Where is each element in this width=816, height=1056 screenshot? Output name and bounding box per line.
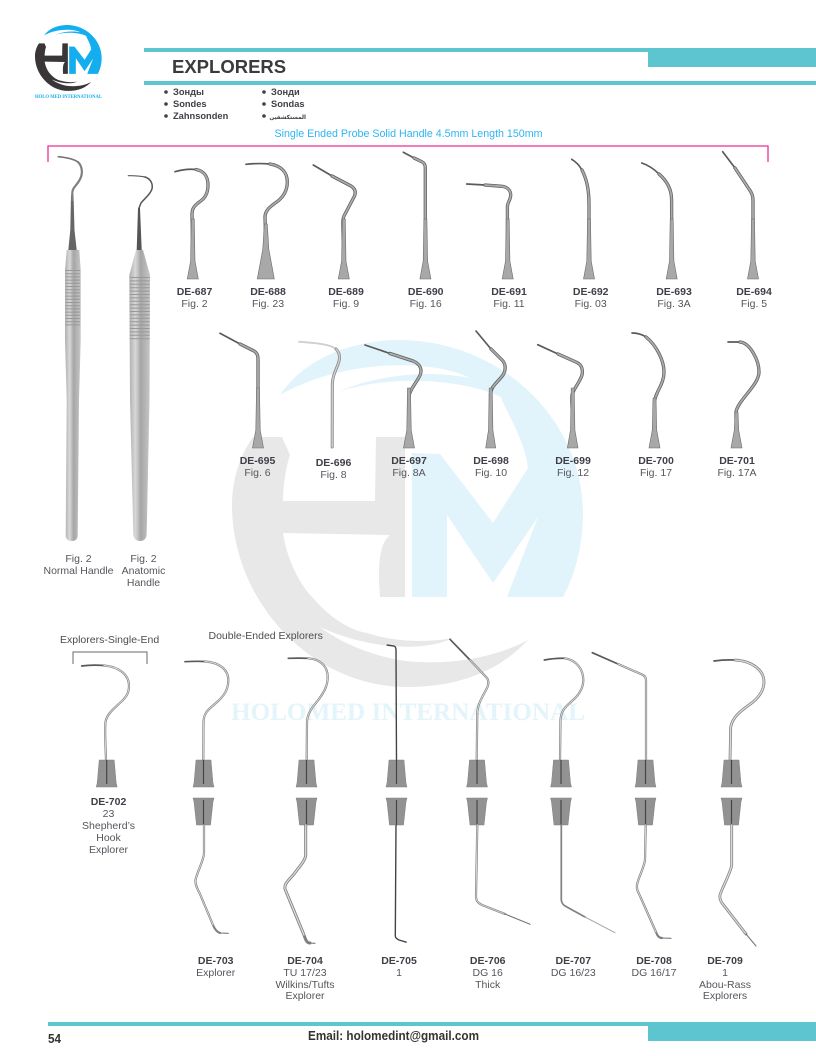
label: DE-690: DE-690 (408, 286, 444, 298)
footer email: Email: holomedint@gmail.com (308, 1029, 479, 1043)
label: DE-706: DE-706 (470, 955, 506, 967)
heading: explorers single end: Explorers-Single-End (60, 634, 159, 646)
label: DE-694: Fig. 5 (741, 298, 767, 310)
watermark logo: HOLOMED INTERNATIONAL (231, 697, 585, 726)
label: DE-709: DE-709 (707, 955, 743, 967)
label: DE-708: DG 16/17 (632, 967, 677, 979)
instrument: DE-698 (476, 331, 505, 448)
instrument: DE-690 (403, 152, 431, 279)
instrument: DE-696 (298, 342, 340, 447)
instrument: DE-705 (386, 645, 407, 942)
instrument: DE-697 (365, 345, 421, 448)
subtitle: Single Ended Probe Solid Handle 4.5mm Length 150mm (274, 128, 542, 140)
label: DE-708: DE-708 (636, 955, 672, 967)
label: DE-689: Fig. 9 (333, 298, 359, 310)
instrument: DE-699 (538, 345, 582, 448)
instrument: DE-700 (632, 333, 664, 448)
footer bars (48, 1022, 816, 1041)
label: DE-701: Fig. 17A (717, 467, 757, 479)
label: DE-698: DE-698 (473, 455, 509, 467)
label: DE-692: Fig. 03 (575, 298, 607, 310)
label: DE-706: DG 16 (473, 967, 503, 979)
label: DE-690: Fig. 16 (410, 298, 442, 310)
label: DE-687: DE-687 (177, 286, 212, 298)
instrument: DE-687 (175, 169, 208, 279)
label: DE-688: Fig. 23 (252, 298, 284, 310)
label: DE-700: Fig. 17 (640, 467, 672, 479)
label: DE-702: Explorer (89, 844, 129, 856)
label: DE-704: DE-704 (287, 955, 323, 967)
header bars (144, 48, 816, 85)
multilingual names list: Зонди (271, 87, 300, 97)
label: DE-702: Hook (96, 832, 122, 844)
label: DE-707: DE-707 (555, 955, 591, 967)
label: DE-693: Fig. 3A (657, 298, 691, 310)
label: DE-704: Wilkins/Tufts (275, 979, 335, 991)
label: DE-691: DE-691 (491, 286, 527, 298)
label: normal handle: Normal Handle (43, 565, 114, 577)
instrument: DE-695 (220, 333, 264, 448)
label: DE-702: 23 (103, 808, 114, 820)
label: DE-688: DE-688 (250, 286, 286, 298)
instrument: DE-689 (313, 165, 355, 279)
label: DE-699: DE-699 (555, 455, 591, 467)
logo (35, 25, 102, 100)
label: DE-693: DE-693 (656, 286, 692, 298)
label: DE-705: DE-705 (381, 955, 417, 967)
instrument: DE-693 (642, 163, 677, 279)
page number: 54 (48, 1032, 61, 1046)
heading: double ended explorers: Double-Ended Explorers (208, 630, 323, 642)
label: DE-702: DE-702 (91, 796, 126, 808)
label: DE-698: Fig. 10 (475, 467, 507, 479)
label: DE-703: DE-703 (198, 955, 234, 967)
label: DE-702: Shepherd’s (82, 820, 135, 832)
label: DE-699: Fig. 12 (557, 467, 589, 479)
watermark logo (231, 340, 585, 726)
label: DE-704: Explorer (285, 990, 325, 1002)
instrument: DE-688 (246, 164, 287, 279)
instrument: DE-692 (572, 159, 594, 279)
title: EXPLORERS (172, 56, 286, 77)
label: DE-696: Fig. 8 (320, 469, 347, 481)
label: DE-694: DE-694 (736, 286, 772, 298)
multilingual names list (164, 87, 306, 121)
instrument: DE-703 (185, 661, 228, 933)
label: anatomic handle: Anatomic (122, 565, 165, 577)
logo: HOLO MED INTERNATIONAL (35, 94, 102, 100)
label: DE-689: DE-689 (328, 286, 364, 298)
label: DE-709: Abou-Rass (699, 979, 751, 991)
label: DE-700: DE-700 (638, 455, 674, 467)
label: DE-696: DE-696 (316, 457, 351, 469)
multilingual names list: المستكشفين (269, 114, 306, 121)
label: DE-703: Explorer (196, 967, 236, 979)
label: anatomic handle: Handle (127, 577, 160, 589)
label: DE-697: Fig. 8A (392, 467, 426, 479)
label: DE-691: Fig. 11 (493, 298, 525, 310)
label: DE-709: Explorers (703, 990, 747, 1002)
label: anatomic handle: Fig. 2 (130, 553, 157, 565)
instrument: DE-701 (728, 342, 759, 448)
label: normal handle: Fig. 2 (65, 553, 92, 565)
label: DE-704: TU 17/23 (283, 967, 327, 979)
instrument: DE-709 (714, 660, 764, 946)
instrument: DE-691 (467, 184, 513, 279)
label: DE-695: Fig. 6 (244, 467, 271, 479)
label: DE-701: DE-701 (719, 455, 755, 467)
instrument: DE-707 (544, 658, 615, 933)
label: DE-707: DG 16/23 (551, 967, 596, 979)
instrument: DE-704 (285, 658, 328, 943)
instrument: DE-708 (592, 653, 671, 938)
instrument: DE-706 (450, 639, 530, 924)
label: DE-697: DE-697 (391, 455, 427, 467)
instrument: anatomic handle probe (128, 176, 152, 541)
multilingual names list: Sondes (173, 99, 207, 109)
label: DE-695: DE-695 (240, 455, 275, 467)
label: DE-709: 1 (722, 967, 728, 979)
gray bracket (73, 652, 147, 664)
multilingual names list: Sondas (271, 99, 305, 109)
label: DE-687: Fig. 2 (181, 298, 208, 310)
label: DE-705: 1 (396, 967, 402, 979)
instrument: normal handle probe (58, 157, 82, 541)
multilingual names list: Zahnsonden (173, 111, 229, 121)
label: DE-706: Thick (475, 979, 501, 991)
label: DE-692: DE-692 (573, 286, 609, 298)
pink bracket (48, 146, 768, 162)
instrument: DE-702 (82, 665, 129, 787)
instrument: DE-694 (723, 152, 758, 279)
multilingual names list: Зонды (173, 87, 204, 97)
